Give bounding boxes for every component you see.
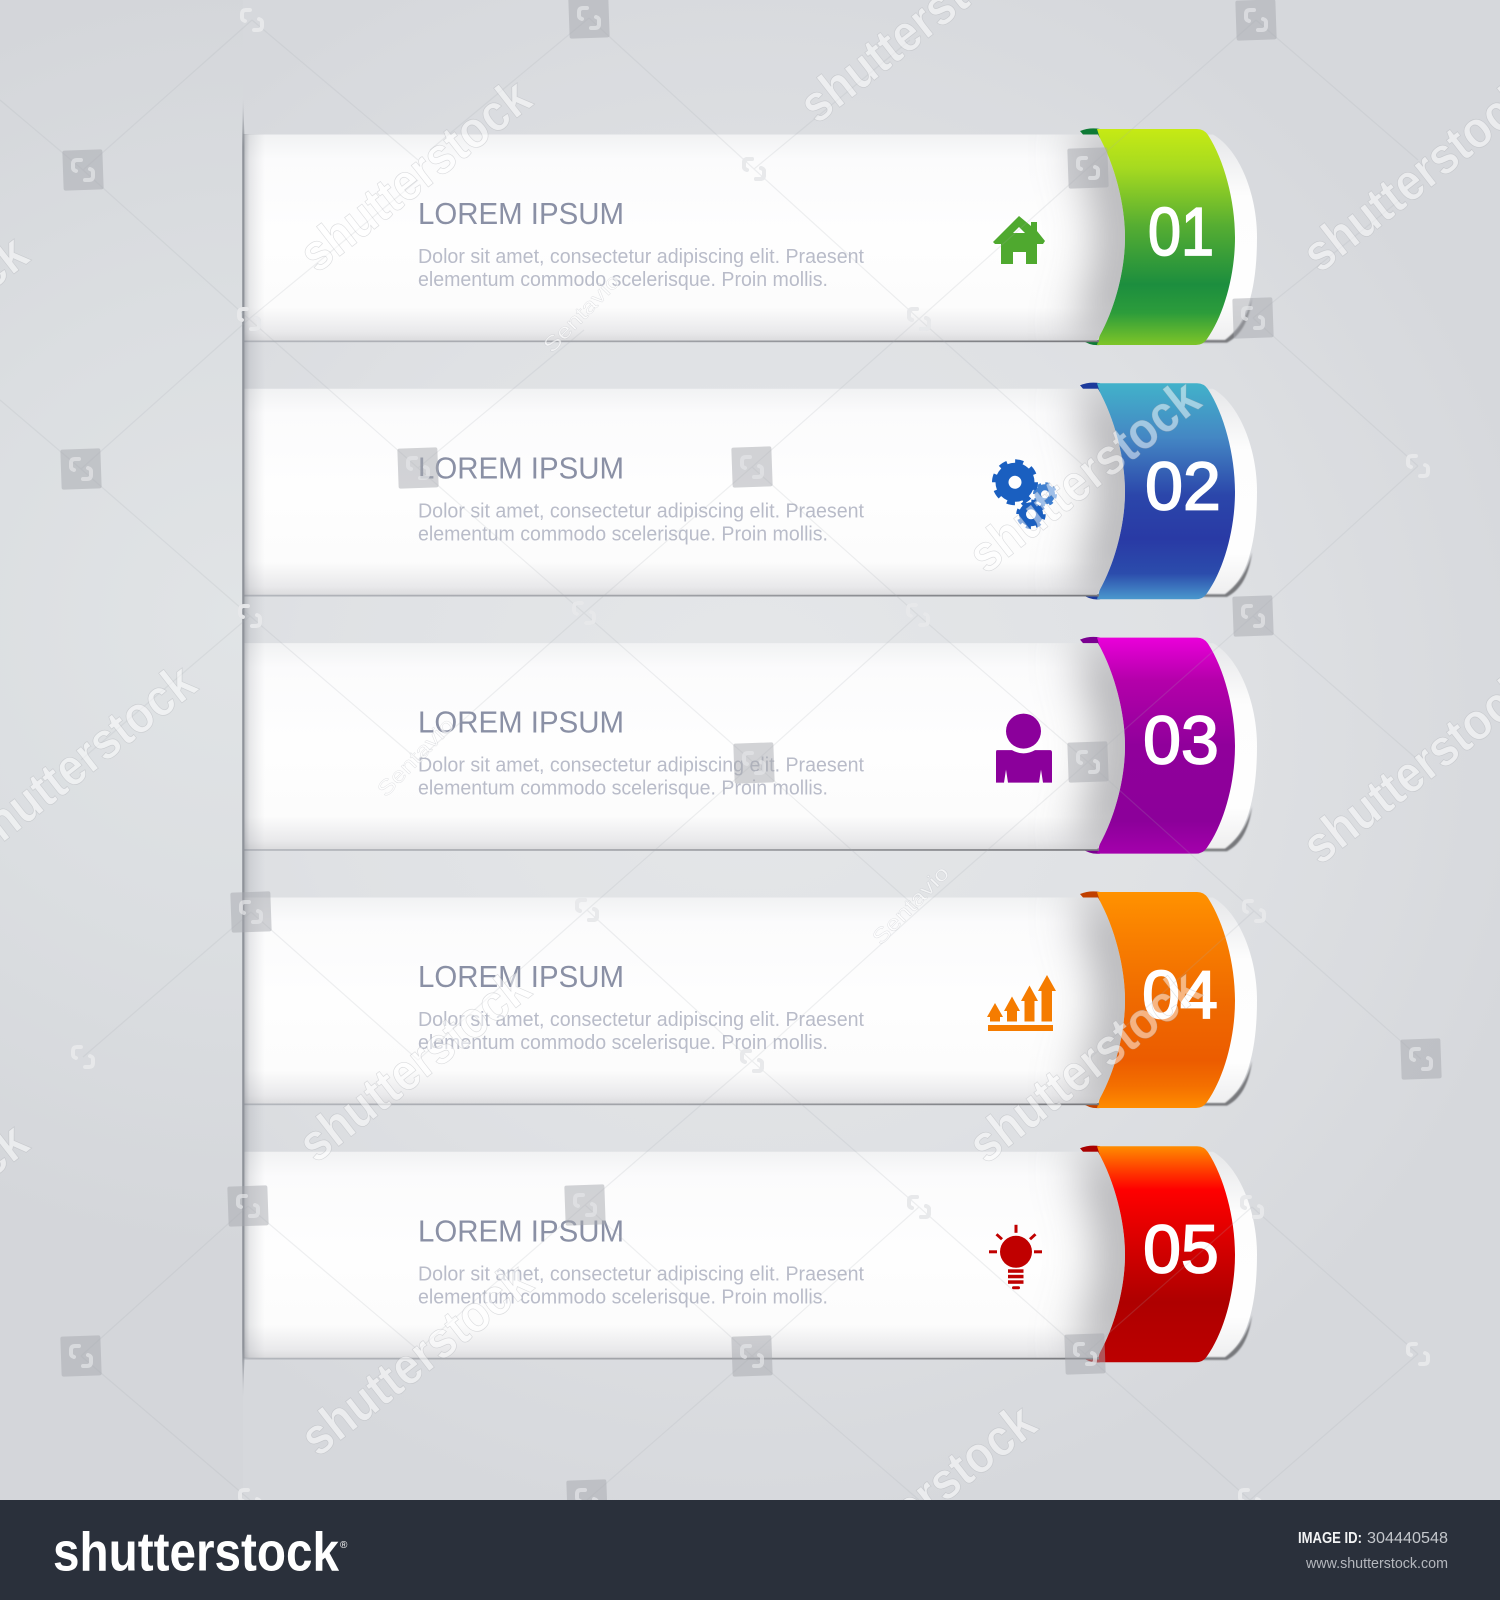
row 2 body text: Dolor sit amet, consectetur adipiscing elit. Praesent xyxy=(418,500,864,522)
row 4 number: 04 xyxy=(1142,957,1218,1033)
row 2 number: 02 xyxy=(1145,448,1221,524)
shutterstock watermark text: shutterstock xyxy=(958,959,1211,1174)
Sentavio watermark text xyxy=(373,270,954,949)
row 1 back cap xyxy=(1190,134,1257,343)
shutterstock watermark text: shutterstock xyxy=(290,1252,543,1467)
row 2 panel xyxy=(243,389,1125,596)
row 1 number: 01 xyxy=(1148,194,1214,270)
left slit shadow xyxy=(242,95,265,1400)
row 2 heading: LOREM IPSUM xyxy=(418,450,624,485)
row 2: blue item 02 xyxy=(243,383,1257,599)
row 3 body text: elementum commodo scelerisque. Proin mollis. xyxy=(418,778,828,800)
row 4 body text: Dolor sit amet, consectetur adipiscing elit. Praesent xyxy=(418,1009,864,1031)
row 3: purple item 03 xyxy=(243,637,1257,854)
row 1 ribbon tab xyxy=(1080,128,1235,345)
row 3 heading: LOREM IPSUM xyxy=(418,705,624,740)
shutterstock watermark text: shutterstock xyxy=(288,958,541,1173)
row 2 back cap xyxy=(1190,389,1257,597)
row 5 back cap xyxy=(1190,1152,1257,1360)
row 1 body text: elementum commodo scelerisque. Proin mollis. xyxy=(418,269,828,291)
row 3 panel xyxy=(243,643,1125,851)
row 2 body text xyxy=(418,500,864,545)
row 5 panel xyxy=(243,1152,1125,1360)
row 1 heading: LOREM IPSUM xyxy=(418,196,624,231)
row 4: orange item 04 xyxy=(243,891,1257,1108)
row 4 back cap xyxy=(1190,898,1257,1106)
row 3 body text xyxy=(418,755,864,800)
row 5 heading: LOREM IPSUM xyxy=(418,1213,624,1248)
row 3 ribbon tab xyxy=(1080,637,1235,854)
row 3 number: 03 xyxy=(1143,703,1219,779)
icon: rising arrows chart xyxy=(987,975,1056,1031)
row 1: green item 01 xyxy=(243,128,1257,345)
image id: IMAGE ID: xyxy=(1298,1530,1362,1547)
row 5 ribbon tab xyxy=(1080,1146,1235,1362)
row 2 ribbon tab xyxy=(1080,383,1235,599)
shutterstock watermark text: shutterstock xyxy=(958,369,1211,584)
row 1 panel xyxy=(243,134,1125,342)
Sentavio watermark text: Sentavio xyxy=(868,862,954,949)
row 1 body text: Dolor sit amet, consectetur adipiscing elit. Praesent xyxy=(418,246,864,268)
row 5 number: 05 xyxy=(1143,1211,1219,1287)
icon: house xyxy=(993,216,1045,264)
row 3 back cap xyxy=(1190,643,1257,851)
icon: person xyxy=(996,714,1052,783)
icon: light bulb xyxy=(989,1225,1042,1289)
image id: 304440548 xyxy=(1367,1530,1448,1547)
row 5 body text xyxy=(418,1263,864,1308)
row 4 body text: elementum commodo scelerisque. Proin mollis. xyxy=(418,1032,828,1054)
footer brand logo: shutterstock xyxy=(53,1520,339,1582)
Sentavio watermark text: Sentavio xyxy=(373,714,459,801)
row 3 body text: Dolor sit amet, consectetur adipiscing elit. Praesent xyxy=(418,755,864,777)
row 4 body text xyxy=(418,1009,864,1054)
row 4 ribbon tab xyxy=(1080,891,1235,1108)
row 5 body text: elementum commodo scelerisque. Proin mollis. xyxy=(418,1286,828,1308)
row 4 heading: LOREM IPSUM xyxy=(418,959,624,994)
registered mark: ® xyxy=(340,1540,348,1551)
row 1 body text xyxy=(418,246,864,291)
row 4 panel xyxy=(243,898,1125,1105)
Sentavio watermark text: Sentavio xyxy=(539,270,625,357)
site url: www.shutterstock.com xyxy=(1305,1555,1448,1572)
row 5 body text: Dolor sit amet, consectetur adipiscing elit. Praesent xyxy=(418,1263,864,1285)
footer bar xyxy=(0,1500,1500,1600)
shutterstock watermark text: shutterstock xyxy=(289,68,542,283)
row 2 body text: elementum commodo scelerisque. Proin mollis. xyxy=(418,523,828,545)
icon: gears xyxy=(994,462,1056,527)
row 5: red item 05 xyxy=(243,1146,1257,1362)
